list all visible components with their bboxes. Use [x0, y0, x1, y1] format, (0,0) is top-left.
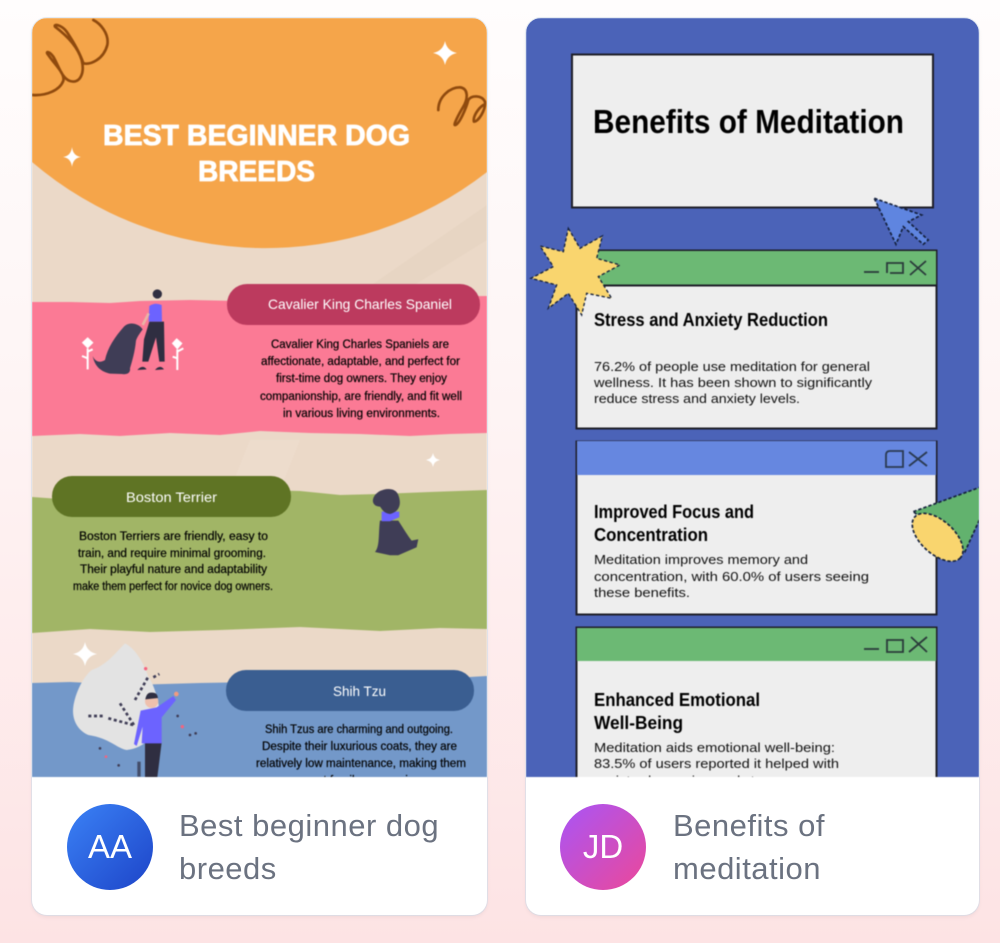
text: Shih Tzu description: Despite their luxurious coats, they are	[262, 741, 457, 753]
text: Cavalier description: in various living environments.	[283, 408, 440, 420]
text: Shih Tzu description: Shih Tzus are charming and outgoing.	[265, 724, 453, 736]
scribble: top left	[33, 20, 108, 95]
title	[103, 120, 410, 188]
text: Boston Terrier description: Boston Terriers are friendly, easy to	[79, 531, 268, 543]
window 1: stress and anxiety: 76.2% of people use meditation for general	[594, 360, 870, 374]
window 3: emotional well-being: Well-Being	[594, 713, 683, 733]
title box	[572, 54, 933, 208]
pill: Shih Tzu: Shih Tzu	[333, 683, 386, 699]
title: BEST BEGINNER DOG	[103, 120, 410, 152]
text: Cavalier description: affectionate, adaptable, and perfect for	[261, 356, 460, 368]
window 1: stress and anxiety: reduce stress and anxiety levels.	[594, 392, 800, 406]
confetti dots	[99, 715, 197, 767]
footer: dog breeds caption: Best beginner dog	[179, 808, 439, 843]
white flowers	[82, 337, 183, 370]
person	[145, 743, 162, 777]
window 1: stress and anxiety	[576, 250, 936, 428]
window 3: emotional well-being: Meditation aids emotional well-being:	[594, 741, 835, 755]
window 3: emotional well-being: 83.5% of users reported it helped with	[594, 757, 839, 771]
scribble: top right	[438, 87, 485, 125]
dog	[93, 324, 143, 374]
text: Cavalier description	[260, 339, 462, 420]
pill: Shih Tzu	[226, 670, 474, 711]
icon: yellow starburst	[531, 228, 620, 315]
orange header shape	[32, 18, 487, 248]
sparkles	[63, 41, 457, 666]
illustration: person petting dog	[82, 289, 183, 374]
window controls	[886, 451, 927, 467]
title: BREEDS	[198, 156, 315, 188]
window 1: stress and anxiety: wellness. It has been shown to significantly	[593, 376, 873, 390]
text: Shih Tzu description	[256, 724, 466, 787]
text: Cavalier description: first-time dog owners. They enjoy	[276, 373, 447, 385]
paper background	[32, 18, 487, 777]
window 2: focus and concentration: Concentration	[594, 525, 708, 545]
footer: dog breeds caption: breeds	[179, 851, 277, 886]
text: Shih Tzu description: relatively low maintenance, making them	[256, 758, 466, 770]
pill: Boston Terrier	[52, 476, 291, 517]
window controls	[864, 261, 926, 275]
illustration: sitting dog	[373, 489, 418, 555]
text: Boston Terrier description	[73, 531, 273, 593]
title box: Benefits of Meditation	[593, 103, 904, 140]
window 2: focus and concentration: these benefits.	[594, 586, 690, 600]
pink band	[32, 296, 487, 436]
footer: meditation caption: Benefits of	[673, 808, 825, 843]
window 3: emotional well-being	[576, 628, 936, 798]
green band	[32, 490, 487, 633]
footer: meditation avatar: JD	[583, 828, 623, 865]
panel: dog breeds infographic thumbnail	[32, 18, 487, 778]
footer: dog breeds caption	[179, 808, 439, 886]
window 1: stress and anxiety: Stress and Anxiety Reduction	[594, 310, 828, 330]
window 2: focus and concentration: Improved Focus and	[594, 502, 754, 522]
text: Boston Terrier description: Their playful nature and adaptability	[80, 564, 267, 576]
text: Cavalier description: Cavalier King Charles Spaniels are	[271, 339, 449, 351]
footer: meditation avatar	[560, 804, 646, 890]
window 2: focus and concentration	[576, 441, 936, 614]
window 2: focus and concentration: Meditation improves memory and	[594, 553, 808, 567]
text: Boston Terrier description: train, and require minimal grooming.	[78, 548, 266, 560]
text: Boston Terrier description: make them perfect for novice dog owners.	[73, 581, 273, 593]
illustration: person with large leaf	[73, 643, 197, 777]
text: Cavalier description: companionship, are friendly, and fit well	[260, 391, 462, 403]
footer: dog breeds avatar	[67, 804, 153, 890]
window controls	[864, 637, 927, 652]
person	[142, 322, 165, 362]
panel: meditation infographic thumbnail	[526, 18, 979, 778]
card: best beginner dog breeds	[32, 18, 487, 915]
footer: meditation caption: meditation	[673, 851, 821, 886]
card: benefits of meditation	[526, 18, 979, 915]
pill: Cavalier King Charles Spaniel	[227, 284, 480, 325]
leaf	[73, 643, 160, 750]
pill: Boston Terrier: Boston Terrier	[126, 489, 217, 505]
icon: cursor arrow	[874, 198, 928, 244]
icon: green and yellow cone	[904, 487, 982, 570]
footer: dog breeds avatar: AA	[88, 828, 132, 865]
pill: Cavalier King Charles Spaniel: Cavalier King Charles Spaniel	[268, 296, 452, 312]
window 3: emotional well-being: Enhanced Emotional	[594, 690, 760, 710]
blue band	[32, 676, 487, 777]
blue background	[526, 18, 979, 777]
footer: meditation caption	[673, 808, 825, 886]
window 2: focus and concentration: concentration, with 60.0% of users seeing	[594, 570, 869, 584]
